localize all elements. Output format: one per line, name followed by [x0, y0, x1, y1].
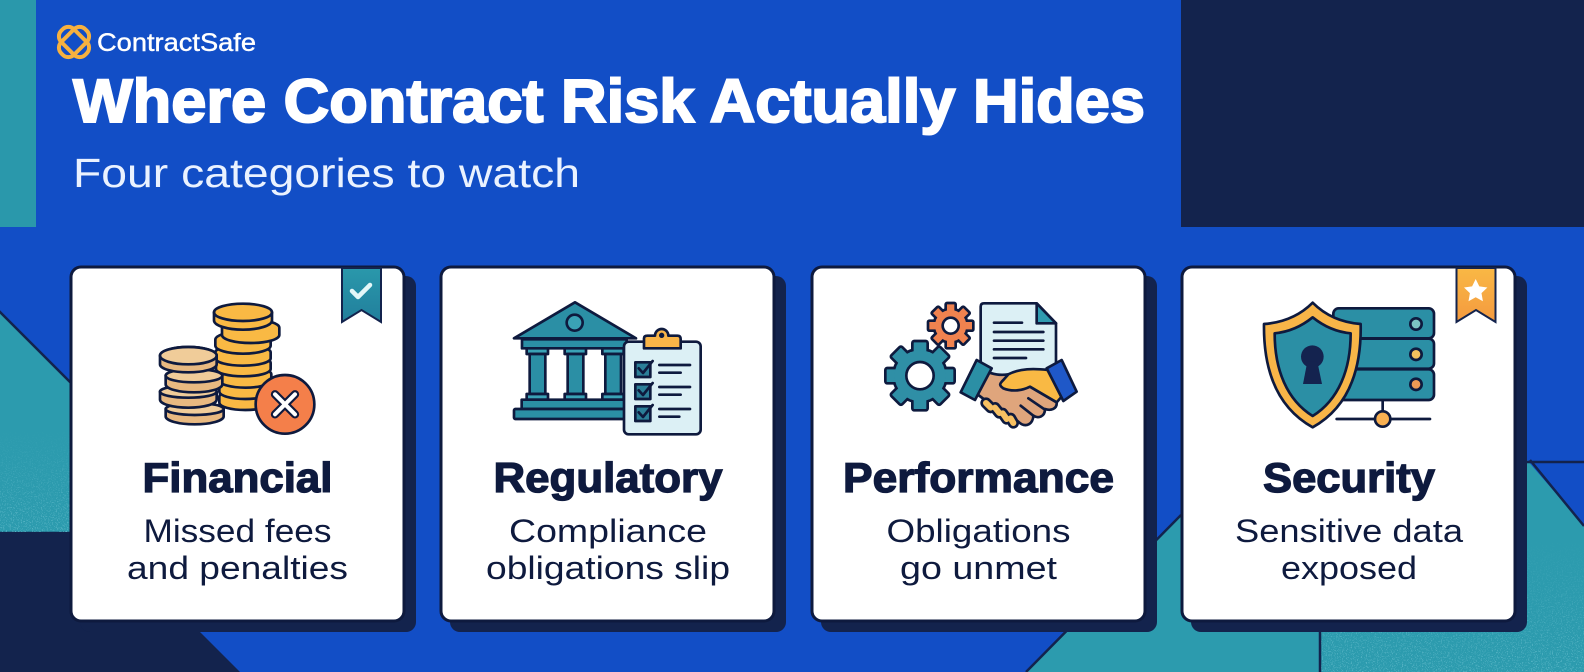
teal header strip — [0, 0, 36, 227]
card shadow — [821, 276, 1157, 632]
logo — [56, 24, 256, 60]
heading: Financial — [142, 454, 332, 501]
left coin stack — [160, 347, 224, 424]
subtitle: Four categories to watch — [73, 150, 580, 196]
heading: Performance — [843, 454, 1114, 501]
bottom right teal shape — [1026, 400, 1584, 672]
card body — [71, 267, 404, 621]
clipboard — [624, 329, 701, 434]
description — [127, 513, 348, 586]
cross badge — [256, 375, 314, 434]
bottom right edge lines — [1026, 460, 1584, 672]
document — [981, 303, 1056, 385]
icon: bank and checklist — [514, 302, 701, 434]
large gear — [885, 341, 955, 410]
card shadow — [450, 276, 786, 632]
card: Financial — [71, 267, 416, 632]
heading: Security — [1263, 454, 1436, 501]
icon: gears, document and handshake — [885, 303, 1077, 425]
ribbon with check — [342, 268, 381, 322]
bottom right speckle — [1321, 540, 1584, 672]
logo wordmark: ContractSafe — [97, 29, 256, 57]
card: Regulatory — [441, 267, 786, 632]
icon: shield and server — [1264, 303, 1434, 427]
shield — [1264, 303, 1361, 427]
navy header block — [1181, 0, 1584, 227]
card body — [441, 267, 774, 621]
keyhole — [1301, 345, 1324, 384]
handshake — [961, 360, 1077, 425]
description: exposed — [1281, 550, 1417, 586]
description: Missed fees — [144, 513, 332, 549]
description: Obligations — [886, 513, 1070, 549]
left speckle — [0, 430, 72, 532]
heading: Regulatory — [494, 454, 723, 501]
description: go unmet — [900, 550, 1057, 586]
description — [486, 513, 730, 586]
left teal shape — [0, 307, 72, 533]
card: Security — [1182, 267, 1527, 632]
description — [886, 513, 1070, 586]
card body — [812, 267, 1145, 621]
card shadow — [80, 276, 416, 632]
small gear — [928, 303, 973, 348]
logo mark — [56, 24, 92, 60]
bottom left navy shape — [0, 533, 240, 672]
card body — [1182, 267, 1515, 621]
description: Sensitive data — [1235, 513, 1463, 549]
title: Where Contract Risk Actually Hides — [73, 67, 1145, 135]
description: Compliance — [509, 513, 707, 549]
fingers — [986, 403, 1013, 423]
description: and penalties — [127, 550, 348, 586]
description: obligations slip — [486, 550, 730, 586]
card shadow — [1191, 276, 1527, 632]
card: Performance — [812, 267, 1157, 632]
description — [1235, 513, 1463, 586]
right coin stack — [214, 304, 279, 410]
icon: coins with cross — [160, 304, 314, 434]
bank — [514, 302, 636, 419]
ribbon with star — [1456, 268, 1496, 322]
server — [1333, 308, 1434, 427]
